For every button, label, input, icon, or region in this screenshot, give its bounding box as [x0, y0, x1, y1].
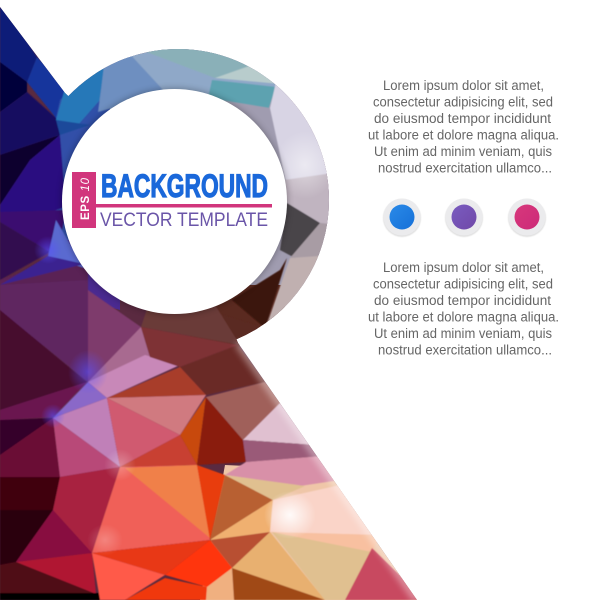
text block: top: Ut enim ad minim veniam, quis [374, 144, 552, 159]
text block: bottom: do eiusmod tempor incididunt [374, 293, 551, 308]
right side light facets [206, 382, 285, 440]
text block: top [368, 78, 559, 176]
text block: top: ut labore et dolore magna aliqua. [368, 128, 559, 142]
colour buttons [383, 198, 546, 237]
EPS label: EPS 10 [80, 177, 92, 220]
bottom red facets [92, 540, 210, 575]
lower left maroon facets [0, 280, 88, 382]
button: blue [383, 198, 421, 237]
VECTOR TEMPLATE subheading: VECTOR TEMPLATE [100, 210, 268, 231]
upper left blue facets [0, 0, 425, 600]
text block: bottom: ut labore et dolore magna aliqua. [368, 310, 559, 324]
text block: bottom: Ut enim ad minim veniam, quis [374, 326, 552, 341]
text block: bottom [368, 260, 559, 358]
soft edge along diagonal [238, 343, 417, 600]
center pink and red facets [53, 382, 107, 418]
text block: bottom: Lorem ipsum dolor sit amet, [383, 260, 544, 275]
light glows [34, 131, 335, 556]
text block: bottom: nostrud exercitation ullamco... [378, 342, 552, 358]
text block: bottom: consectetur adipisicing elit, sed [373, 276, 553, 292]
polygon mosaic background shape [0, 0, 425, 600]
text block: top: Lorem ipsum dolor sit amet, [383, 78, 544, 93]
ring facets [55, 68, 104, 124]
soft shadow around inner circle [62, 88, 288, 314]
button: purple [445, 198, 483, 237]
EPS badge [72, 172, 96, 228]
text block: top: consectetur adipisicing elit, sed [373, 94, 553, 110]
white circle [62, 89, 287, 314]
rule [96, 204, 272, 208]
text block: top: do eiusmod tempor incididunt [374, 111, 551, 126]
text block: top: nostrud exercitation ullamco... [378, 160, 552, 176]
button: pink [508, 198, 546, 237]
BACKGROUND heading: BACKGROUND [101, 168, 268, 204]
logo lockup [72, 168, 272, 231]
